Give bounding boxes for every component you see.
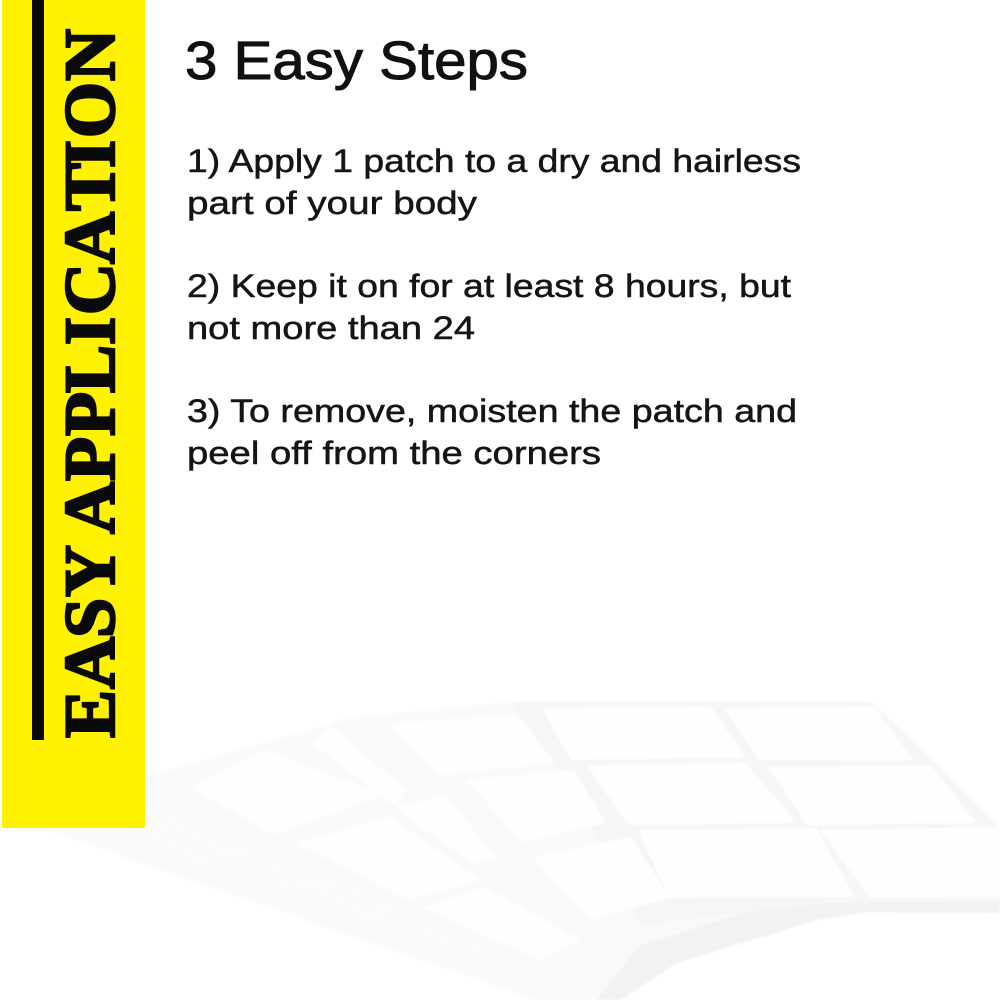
step 2 xyxy=(187,268,791,346)
step 1 xyxy=(187,143,801,221)
step 1: 1) Apply 1 patch to a dry and hairless xyxy=(187,143,801,179)
banner black rule xyxy=(32,0,44,740)
step 3: 3) To remove, moisten the patch and xyxy=(187,393,797,429)
yellow side banner xyxy=(2,0,145,828)
illustration: stacked patch sheets xyxy=(38,702,1000,1000)
sheet stack base xyxy=(38,702,1000,1000)
top sheet patches xyxy=(542,707,1000,898)
step 3 xyxy=(187,393,797,471)
textured patches xyxy=(96,813,548,975)
step 3: peel off from the corners xyxy=(187,435,601,471)
sheet edge shadow xyxy=(596,900,1000,1000)
middle sheet patches xyxy=(389,715,670,920)
heading: 3 Easy Steps xyxy=(185,31,528,91)
banner title: EASY APPLICATION xyxy=(50,29,130,738)
top sheet xyxy=(511,702,1000,925)
lower sheet patches xyxy=(191,725,580,960)
step 1: part of your body xyxy=(187,185,477,221)
step 2: not more than 24 xyxy=(187,310,475,346)
step 2: 2) Keep it on for at least 8 hours, but xyxy=(187,268,791,304)
